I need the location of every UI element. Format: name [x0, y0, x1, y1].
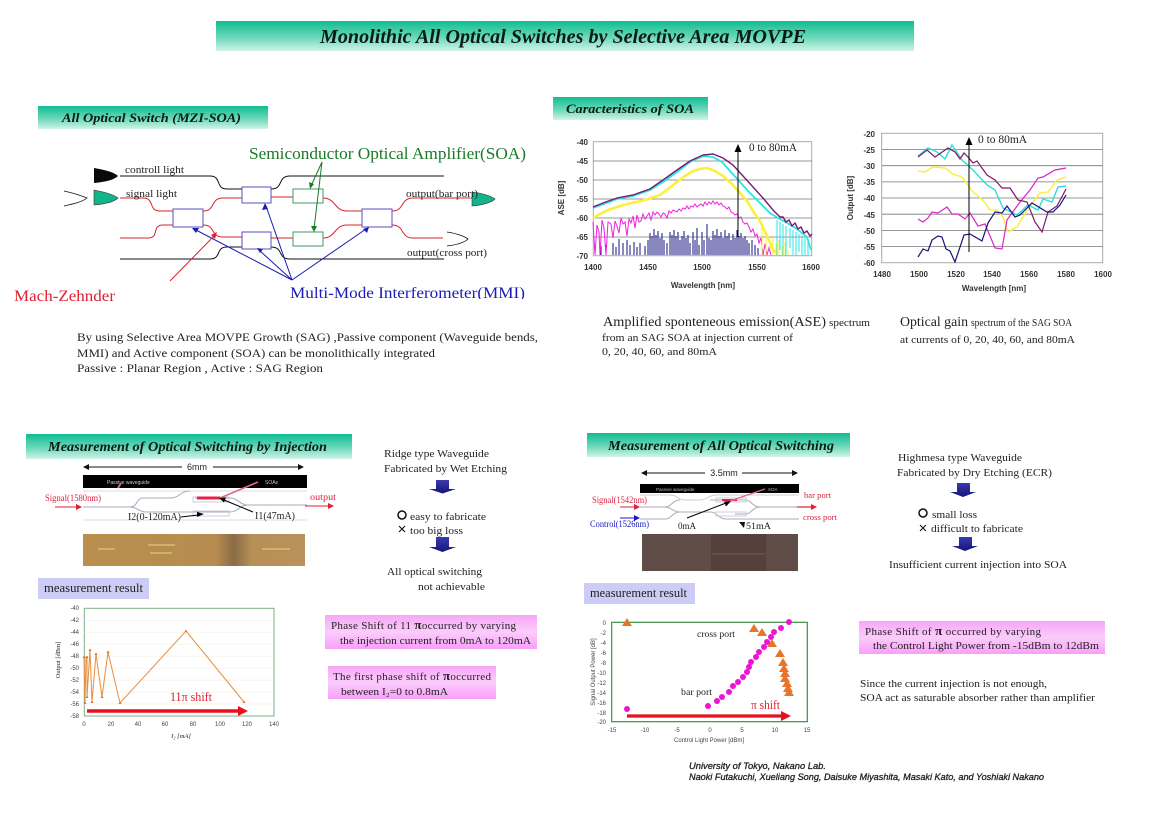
axis labels: 1480 — [873, 270, 891, 279]
chart: ASE spectrum — [557, 138, 820, 290]
heading: Measurement of Optical Switching by Injection — [47, 439, 327, 454]
device schematic — [45, 462, 336, 523]
series 0 mA — [601, 224, 758, 255]
control label and arrow: Control(1526nm) — [590, 519, 649, 529]
axis labels: -65 — [576, 233, 589, 242]
axis labels: 1450 — [639, 263, 657, 272]
output label and arrow — [305, 493, 336, 509]
axis labels: Wavelength [nm] — [671, 281, 735, 290]
text: description: MMI) and Active component (SOA) can be monolithically integrated — [77, 346, 435, 360]
dimension arrow: 6mm: 6mm — [187, 462, 207, 472]
axis labels: Output [dBm] — [55, 642, 62, 678]
axis labels: -40 — [863, 194, 876, 203]
axis labels: -40 — [576, 138, 589, 147]
text: saturable absorber note — [860, 678, 1095, 704]
current labels — [678, 501, 772, 531]
text: saturable absorber note: SOA act as saturable absorber rather than amplifier — [860, 692, 1095, 704]
title: Monolithic All Optical Switches by Selective Area MOVPE — [319, 26, 806, 48]
label: Mach-Zehnder: Mach-Zehnder — [14, 288, 116, 305]
axis labels: -2 — [601, 631, 607, 637]
port labels: controll light — [125, 165, 184, 176]
black label bar: SOA — [768, 487, 778, 492]
text: description — [77, 330, 538, 375]
axis labels: Signal Output Power [dB] — [591, 638, 597, 706]
axis labels: Output [dB] — [846, 175, 855, 220]
axis labels: -54 — [70, 690, 80, 696]
axis labels: -52 — [70, 678, 80, 684]
axis labels: 80 — [190, 722, 197, 728]
black label bar: Passive waveguide — [656, 487, 695, 492]
text: highmesa waveguide flow: Highmesa type Waveguide — [898, 452, 1022, 464]
series 20 mA — [918, 168, 1066, 249]
label: I1 — [219, 498, 295, 522]
axis labels: Control Light Power [dBm] — [674, 738, 744, 744]
axis labels: 0 — [708, 728, 712, 734]
callout: phase shift 11 pi: Phase Shift of 11 πoccurred by varying — [331, 617, 516, 632]
SOA pink highlight — [118, 482, 258, 498]
chart: signal output vs control light — [591, 618, 811, 744]
arrow: 11 pi shift — [87, 690, 248, 716]
heading: all optical switch: All Optical Switch (MZI-SOA) — [61, 111, 241, 125]
signal label and arrow: Signal(1580nm) — [45, 493, 101, 503]
axis labels: -5 — [674, 728, 680, 734]
axis labels: -15 — [608, 728, 617, 734]
axis labels: -18 — [597, 711, 607, 717]
arrow: pi shift: π shift — [751, 698, 780, 712]
axis labels: ASE [dB] — [557, 180, 566, 215]
label: measurement result — [584, 583, 695, 604]
axis labels: -45 — [576, 157, 589, 166]
caption: optical gain: spectrum of the SAG SOA — [971, 317, 1072, 329]
arrow: pi shift — [627, 698, 791, 721]
heading: characteristics of SOA — [553, 97, 708, 120]
axis labels: -30 — [863, 162, 876, 171]
axis labels: 40 — [135, 722, 142, 728]
axis labels: 0 — [603, 621, 607, 627]
SOA boxes — [293, 189, 323, 246]
series 80 mA — [593, 154, 812, 236]
signal label and arrow — [45, 493, 101, 510]
axis labels: 1600 — [1094, 270, 1112, 279]
output ports: bar port — [804, 490, 832, 500]
label: measurement result: measurement result — [44, 580, 143, 595]
series 20 mA — [593, 201, 771, 255]
conclusion: All optical switching — [387, 566, 483, 578]
arrow: 0 to 80 mA — [734, 142, 798, 237]
arrow: 0 to 80 mA — [966, 134, 1028, 252]
conclusion: not achievable — [418, 581, 485, 593]
callout: first phase shift: The first phase shift of πoccurred — [333, 668, 492, 683]
callout: phase shift pi: the Control Light Power from -15dBm to 12dBm — [873, 640, 1099, 652]
axis labels: -50 — [70, 666, 80, 672]
caption: optical gain: Optical gain — [900, 315, 968, 330]
axis labels: 1500 — [693, 263, 711, 272]
axis labels: 5 — [740, 728, 744, 734]
axis labels: 1580 — [1057, 270, 1075, 279]
pros and cons: difficult to fabricate — [931, 523, 1023, 535]
SOA pink highlight — [722, 489, 765, 501]
series 60 mA — [593, 156, 811, 255]
axis labels: -6 — [601, 651, 607, 657]
series labels: cross port — [697, 630, 735, 640]
text: ridge waveguide flow: Ridge type Waveguide — [384, 448, 489, 460]
axis labels: 1540 — [983, 270, 1001, 279]
callout arrows: SOA — [309, 162, 322, 232]
panel: measurement of all optical switching — [584, 433, 1105, 744]
callout: first phase shift — [328, 666, 496, 699]
output ports — [797, 490, 838, 522]
axis labels: -14 — [597, 691, 607, 697]
heading: characteristics of SOA: Caracteristics of SOA — [566, 101, 694, 116]
caption: optical gain — [900, 315, 1075, 346]
axis labels: -48 — [70, 654, 80, 660]
axis labels: I₂ [mA] — [170, 733, 191, 740]
axis labels — [591, 621, 811, 744]
callout arrows: MMI — [192, 203, 369, 280]
arrow: 11 pi shift: 11π shift — [170, 690, 212, 704]
MZI-SOA waveguide diagram — [14, 144, 530, 305]
footer: affiliation and authors: University of Tokyo, Nakano Lab. — [689, 761, 826, 771]
pros and cons: small loss — [932, 509, 977, 521]
axis labels: -56 — [70, 702, 80, 708]
panel: all optical switch — [14, 106, 538, 375]
series 40 mA — [918, 167, 1066, 232]
caption: optical gain: at currents of 0, 20, 40, 60, and 80mA — [900, 334, 1075, 346]
callout: phase shift 11 pi — [325, 615, 537, 649]
axis labels: -50 — [863, 227, 876, 236]
heading — [26, 434, 352, 459]
axis labels: -42 — [70, 618, 80, 624]
axis labels: -20 — [863, 130, 876, 139]
axis labels: 120 — [242, 722, 253, 728]
axis labels — [846, 130, 1112, 293]
axis labels: 1500 — [910, 270, 928, 279]
axis labels: 10 — [772, 728, 779, 734]
axis labels: 1560 — [1020, 270, 1038, 279]
signal label and arrow — [592, 495, 647, 510]
dimension arrow: 3.5mm — [641, 468, 798, 478]
current labels: 51mA — [746, 521, 772, 531]
axis labels: -44 — [70, 630, 80, 636]
text: description: Passive : Planar Region , Active : SAG Region — [77, 361, 323, 375]
axis labels: 100 — [215, 722, 226, 728]
series 80 mA — [918, 148, 1066, 232]
black label bar — [83, 475, 307, 488]
pros and cons — [919, 509, 1023, 535]
axis labels: -25 — [863, 146, 876, 155]
series: bar port — [624, 619, 792, 712]
input and output light pulses — [64, 168, 495, 246]
port labels: signal light — [126, 189, 177, 200]
heading: all optical switch — [38, 106, 268, 129]
signal waveguides — [120, 197, 473, 238]
axis labels: -50 — [576, 176, 589, 185]
black label bar: Passive waveguide — [107, 480, 150, 486]
axis labels: -55 — [863, 243, 876, 252]
label: SOA: Semiconductor Optical Amplifier(SOA) — [249, 144, 526, 163]
title — [216, 21, 914, 51]
port labels — [125, 165, 488, 259]
arrow: down 1 — [429, 480, 456, 494]
axis labels: Wavelength [nm] — [962, 284, 1026, 293]
axis labels: 60 — [162, 722, 169, 728]
arrow: down 2 — [429, 537, 456, 552]
axis labels: 0 — [82, 722, 86, 728]
dimension arrow: 3.5mm: 3.5mm — [710, 468, 738, 478]
waveguide traces — [83, 491, 307, 520]
waveguide traces — [640, 495, 799, 519]
arrow: down 1 — [950, 483, 976, 497]
text: ridge waveguide flow — [384, 448, 508, 593]
label: MMI: Multi-Mode Interferometer(MMI) — [290, 285, 525, 302]
output ports: cross port — [803, 512, 838, 522]
dimension arrow: 6mm — [83, 462, 304, 472]
axis labels: -46 — [70, 642, 80, 648]
series 0 mA — [918, 195, 1066, 262]
callout arrow: Mach-Zehnder — [170, 232, 217, 281]
arrow: 0 to 80 mA: 0 to 80mA — [978, 134, 1028, 146]
panel: characteristics of SOA — [553, 97, 1112, 358]
callout: phase shift pi: Phase Shift of π occurred by varying — [865, 623, 1042, 638]
axis labels: -45 — [863, 211, 876, 220]
text: saturable absorber note: Since the current injection is not enough, — [860, 678, 1047, 690]
axis labels: -10 — [641, 728, 650, 734]
text: description: By using Selective Area MOVPE Growth (SAG) ,Passive component (Waveguide bends, — [77, 330, 538, 344]
axis labels: 15 — [804, 728, 811, 734]
axis labels: -20 — [597, 720, 607, 726]
axis labels: -60 — [863, 259, 876, 268]
series 60 mA — [918, 145, 1066, 215]
output label and arrow: output — [310, 493, 336, 503]
axis labels: 1520 — [947, 270, 965, 279]
conclusion: Insufficient current injection into SOA — [889, 559, 1067, 571]
label: I2: I2(0-120mA) — [128, 512, 181, 523]
axis labels: 1400 — [584, 263, 602, 272]
pros and cons: too big loss — [410, 525, 463, 537]
callout: first phase shift: between I₂=0 to 0.8mA — [341, 686, 448, 698]
caption: ASE: 0, 20, 40, 60, and 80mA — [602, 346, 717, 358]
text: highmesa waveguide flow — [889, 452, 1067, 571]
signal label and arrow: Signal(1542nm) — [592, 495, 647, 505]
axis labels: 140 — [269, 722, 280, 728]
chart: optical gain — [846, 130, 1112, 293]
axis labels: -35 — [863, 178, 876, 187]
arrow: down 2 — [952, 537, 978, 551]
caption: ASE — [602, 314, 870, 358]
port labels: output(cross port) — [407, 248, 488, 259]
chart: output vs injection — [55, 606, 280, 740]
axis labels: -60 — [576, 214, 589, 223]
control label and arrow — [590, 515, 649, 529]
callout: phase shift 11 pi: the injection current from 0mA to 120mA — [340, 635, 531, 647]
MMI boxes — [173, 187, 392, 249]
callout: phase shift pi — [859, 621, 1105, 654]
axis labels: -10 — [597, 671, 607, 677]
axis labels: -4 — [601, 641, 607, 647]
axis labels: 1550 — [748, 263, 766, 272]
device schematic — [590, 468, 838, 531]
caption: ASE: spectrum — [829, 317, 870, 329]
heading: Measurement of All Optical Switching — [607, 438, 834, 453]
pros and cons — [398, 511, 486, 537]
axis labels — [557, 138, 820, 290]
series: cross port — [622, 618, 794, 696]
device photo — [83, 534, 305, 566]
label: I1: I1(47mA) — [255, 511, 295, 522]
axis labels — [55, 606, 280, 740]
text: highmesa waveguide flow: Fabricated by Dry Etching (ECR) — [897, 467, 1052, 479]
black label bar — [640, 484, 799, 493]
data line — [82, 630, 246, 704]
axis labels: 1600 — [802, 263, 820, 272]
port labels: output(bar port) — [406, 189, 479, 200]
label: measurement result: measurement result — [590, 585, 687, 600]
caption: ASE: from an SAG SOA at injection current of — [602, 332, 793, 344]
axis labels: -55 — [576, 195, 589, 204]
axis labels: -40 — [70, 606, 80, 612]
axis labels: -16 — [597, 701, 607, 707]
black label bar: SOAs — [265, 480, 279, 486]
series 40 mA — [593, 168, 788, 255]
axis labels: -58 — [70, 714, 80, 720]
text: ridge waveguide flow: Fabricated by Wet Etching — [384, 463, 508, 475]
axis labels: -12 — [597, 681, 607, 687]
footer: affiliation and authors — [689, 761, 1044, 782]
device photo — [642, 534, 798, 571]
axis labels: -70 — [576, 252, 589, 261]
axis labels: 20 — [108, 722, 115, 728]
panel: measurement of optical switching by injection — [26, 434, 537, 740]
conclusion — [387, 566, 485, 593]
label: measurement result — [38, 578, 149, 599]
control waveguides — [120, 176, 444, 259]
series labels: bar port — [681, 688, 712, 698]
current labels: 0mA — [678, 521, 697, 531]
pros and cons: easy to fabricate — [410, 511, 486, 523]
series labels — [681, 630, 735, 698]
arrow: 0 to 80 mA: 0 to 80mA — [749, 142, 798, 154]
caption: ASE: Amplified sponteneous emission(ASE) — [603, 314, 826, 329]
axis labels: -8 — [601, 661, 607, 667]
footer: affiliation and authors: Naoki Futakuchi, Xueliang Song, Daisuke Miyashita, Masaki Kato, and Yoshiaki Nakano — [689, 772, 1044, 782]
heading — [587, 433, 850, 457]
